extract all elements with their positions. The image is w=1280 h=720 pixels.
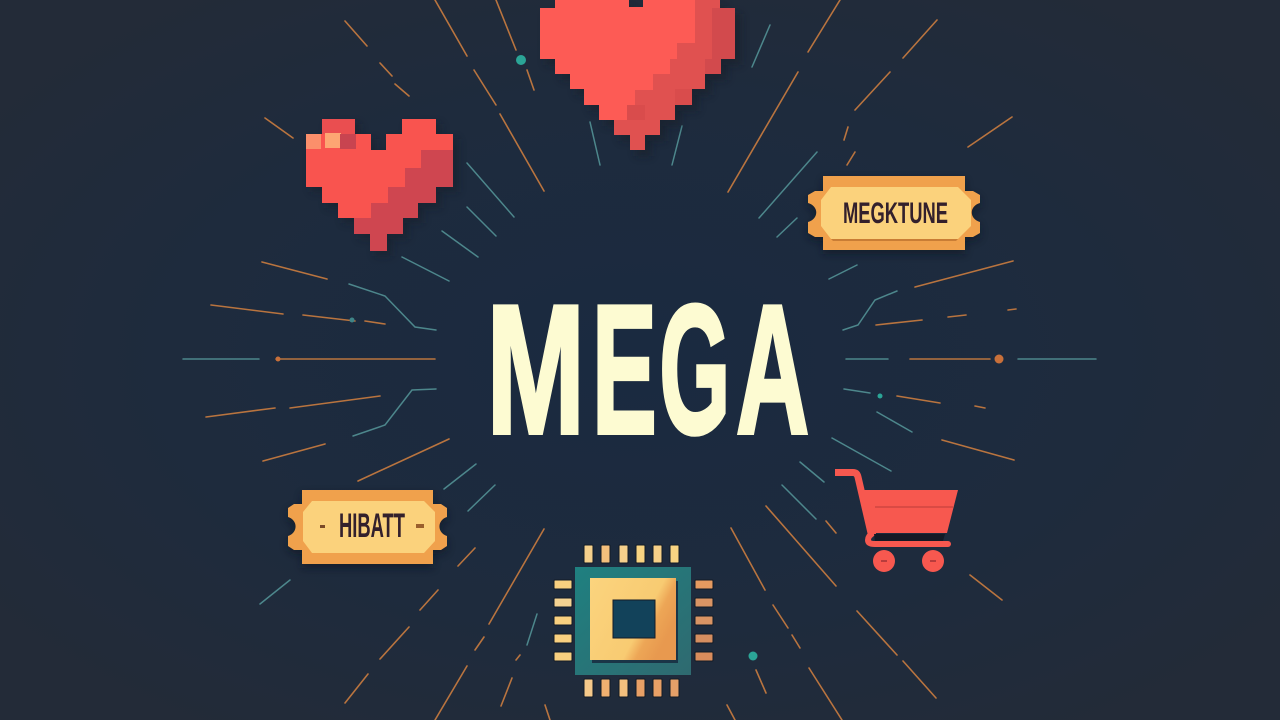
icon: shopping cart [835,472,958,572]
title: G [659,267,730,472]
radiating lines: teal and grey [183,25,1096,645]
title: M [486,267,585,472]
ticket label: HIBATT [339,507,405,545]
chip pins [554,545,713,697]
ticket label: MEGKTUNE [843,197,948,230]
icon: top pixel heart [540,0,741,156]
title [486,267,809,473]
icon: ticket right [808,176,980,254]
icon: ticket left [288,490,447,568]
icon: microchip [554,545,713,697]
accent dots [276,55,1004,660]
radiating lines: orange [206,0,1016,720]
title: E [592,268,657,473]
icon: left pixel heart [306,119,458,256]
title: A [736,268,809,473]
